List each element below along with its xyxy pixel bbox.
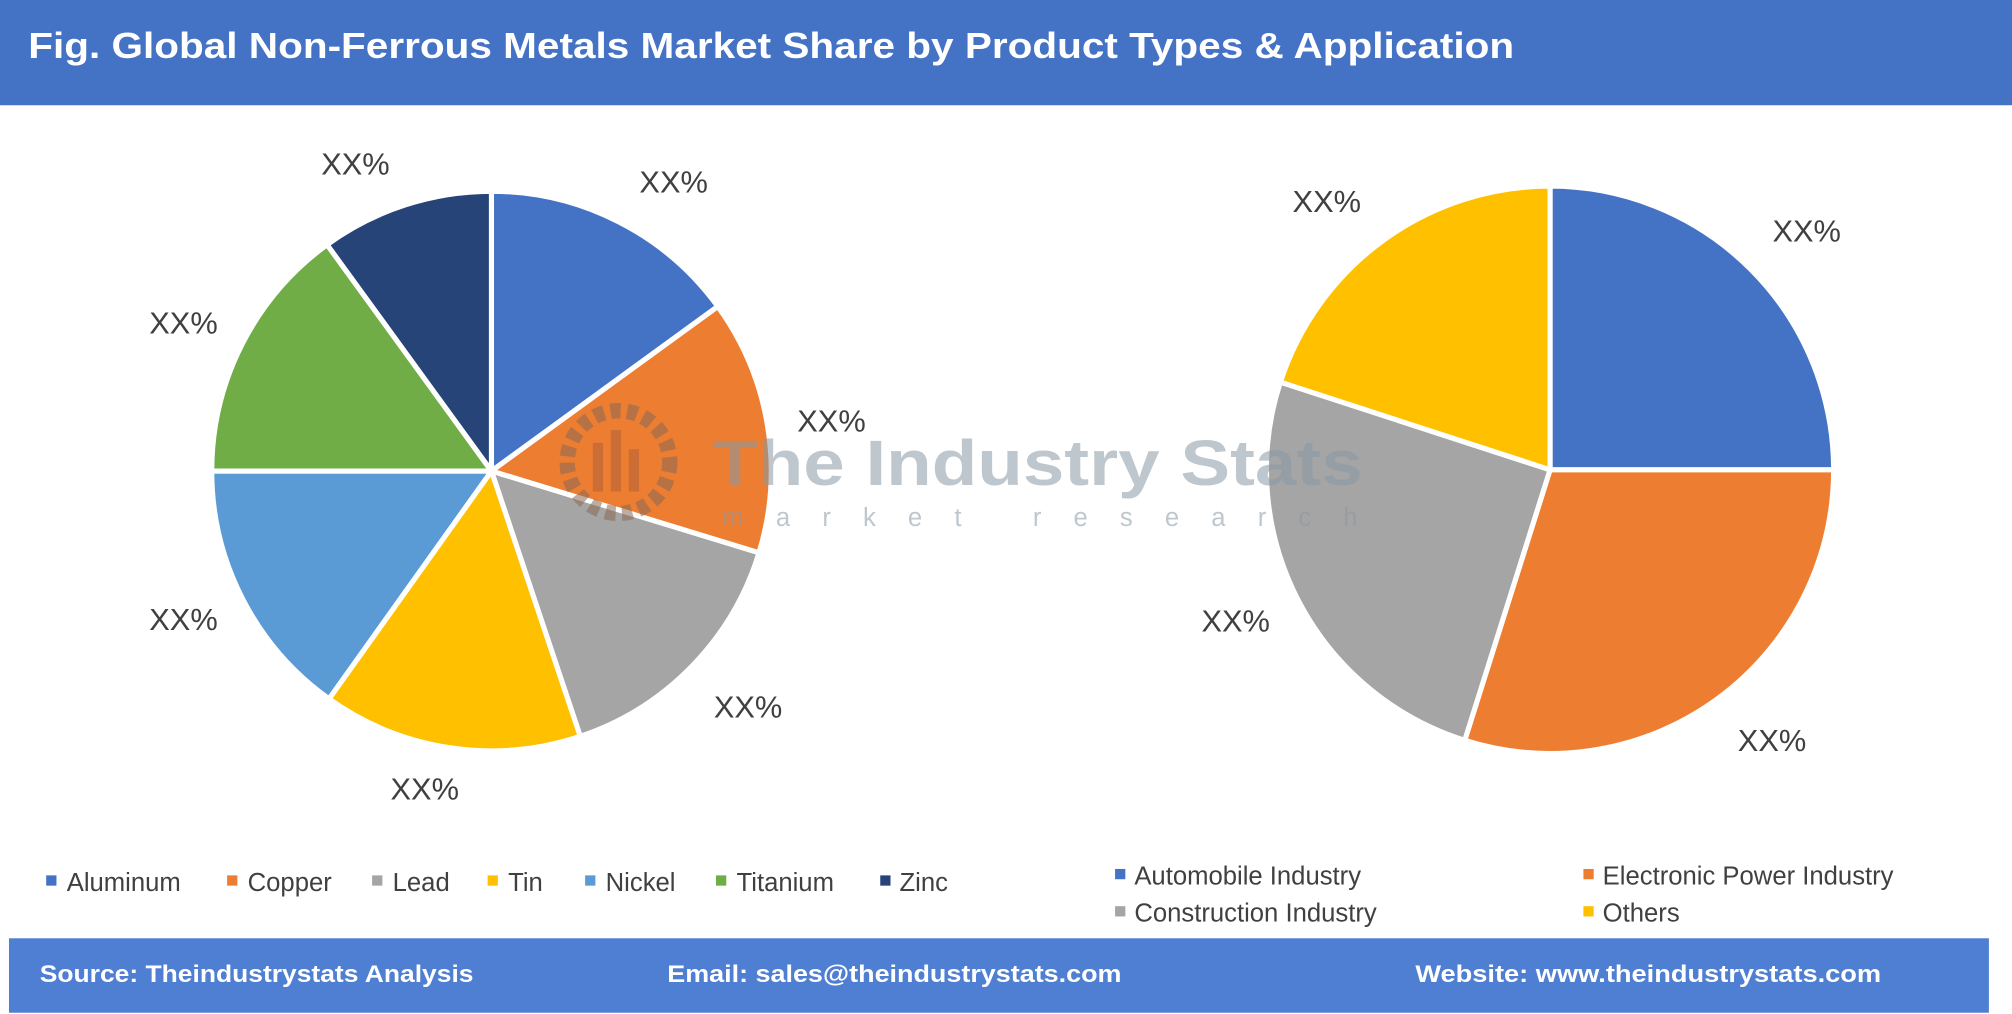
legend: application: Construction Industry	[1134, 900, 1377, 928]
legend: application: Others	[1603, 900, 1680, 928]
legend: application: Electronic Power Industry	[1603, 862, 1894, 890]
data labels: XX%	[1772, 213, 1841, 248]
title: Fig. Global Non-Ferrous Metals Market Share by Product Types & Application	[28, 25, 1514, 66]
legend: product types: Zinc	[899, 869, 948, 897]
data labels: XX%	[714, 689, 782, 725]
data labels: XX%	[1201, 603, 1270, 639]
legend: product types: Titanium	[737, 869, 834, 897]
data labels	[149, 147, 1841, 807]
footer email: Email: sales@theindustrystats.com	[667, 961, 1121, 988]
data labels: XX%	[1738, 723, 1806, 758]
watermark: market research	[722, 504, 1358, 532]
legend: product types: Nickel	[606, 869, 676, 897]
legend: product types: Tin	[508, 869, 543, 897]
footer source: Source: Theindustrystats Analysis	[40, 961, 473, 988]
watermark: The Industry Stats	[712, 427, 1363, 499]
legend: product types: Lead	[393, 869, 450, 897]
footer bar	[9, 938, 1989, 1013]
data labels: XX%	[149, 306, 218, 341]
data labels: XX%	[390, 772, 459, 807]
legend: product types: Aluminum	[67, 869, 181, 897]
legend: application	[1115, 862, 1894, 928]
pie chart: product types	[212, 191, 771, 751]
data labels: XX%	[149, 602, 218, 637]
header bar	[0, 0, 2012, 105]
data labels: XX%	[1293, 184, 1361, 219]
legend: application: Automobile Industry	[1134, 862, 1361, 890]
footer website: Website: www.theindustrystats.com	[1415, 961, 1881, 988]
pie chart: application	[1266, 186, 1834, 753]
data labels: XX%	[639, 165, 708, 200]
data labels: XX%	[797, 403, 866, 438]
watermark	[567, 411, 1363, 532]
legend: product types: Copper	[248, 869, 332, 897]
legend: product types	[46, 869, 948, 897]
data labels: XX%	[321, 147, 390, 182]
